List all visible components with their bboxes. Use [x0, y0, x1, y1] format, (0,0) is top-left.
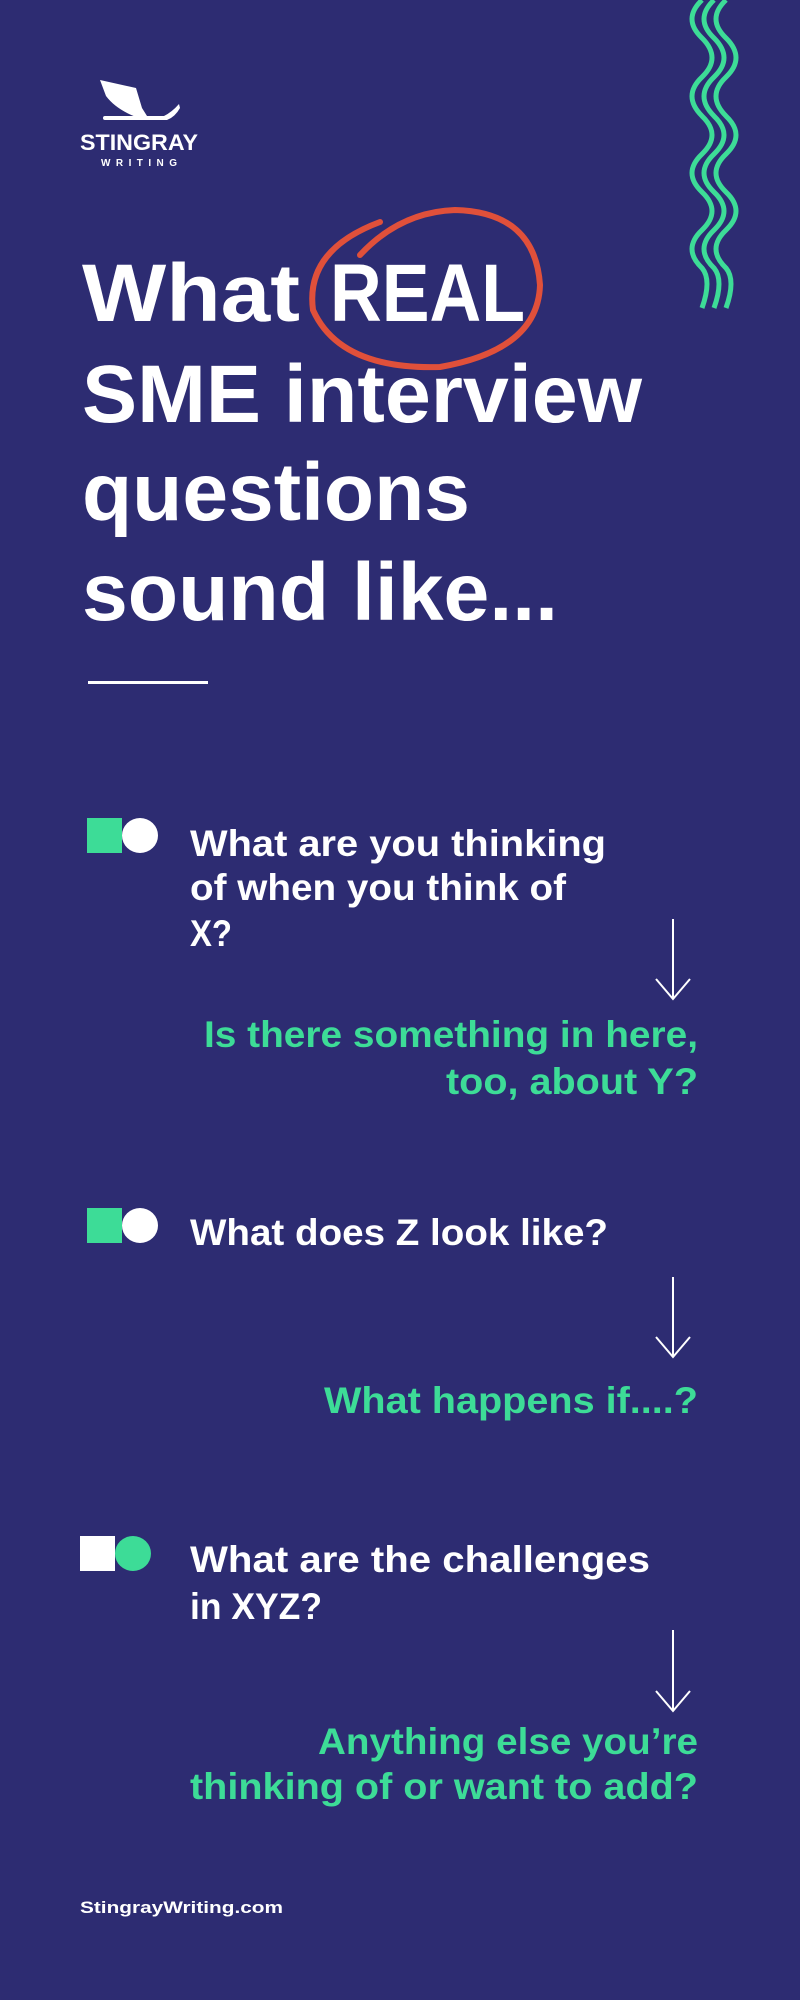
- icon: square and circle: [80, 1536, 151, 1571]
- question 3: in XYZ?: [190, 1586, 322, 1627]
- question 1: X?: [190, 913, 232, 954]
- title: [82, 248, 642, 638]
- decorative wavy lines: [692, 0, 736, 308]
- icon: square and circle: [87, 1208, 158, 1243]
- question 1: of when you think of: [190, 867, 567, 908]
- answer 1: [204, 1014, 698, 1102]
- icon: square and circle: [87, 818, 158, 853]
- answer 3: thinking of or want to add?: [190, 1766, 698, 1807]
- title: What: [82, 248, 300, 339]
- section 2: [87, 1208, 698, 1421]
- logo: Stingray Writing: STINGRAY: [80, 130, 198, 155]
- title: sound like...: [82, 547, 558, 638]
- answer 3: Anything else you’re: [318, 1721, 698, 1762]
- question 1: What are you thinking: [190, 823, 606, 864]
- section 1: [87, 818, 698, 1102]
- answer 1: Is there something in here,: [204, 1014, 698, 1055]
- answer 2: What happens if....?: [324, 1380, 698, 1421]
- question 2: What does Z look like?: [190, 1212, 608, 1253]
- section 3: [80, 1536, 698, 1807]
- arrow 1: [656, 919, 690, 999]
- icon: ship: [100, 80, 180, 120]
- divider: [88, 681, 208, 684]
- logo: Stingray Writing: [80, 80, 198, 169]
- question 3: What are the challenges: [190, 1539, 650, 1580]
- answer 1: too, about Y?: [446, 1061, 698, 1102]
- logo: Stingray Writing: WRITING: [101, 158, 177, 169]
- arrow 2: [656, 1277, 690, 1357]
- title: questions: [82, 447, 470, 538]
- arrow 3: [656, 1630, 690, 1711]
- question 3: [190, 1539, 650, 1627]
- red hand-drawn circle around REAL: [312, 210, 540, 367]
- footer url: StingrayWriting.com: [80, 1898, 283, 1917]
- title: SME interview: [82, 349, 642, 440]
- question 1: [190, 823, 606, 954]
- answer 3: [190, 1721, 698, 1807]
- title: REAL: [330, 248, 525, 339]
